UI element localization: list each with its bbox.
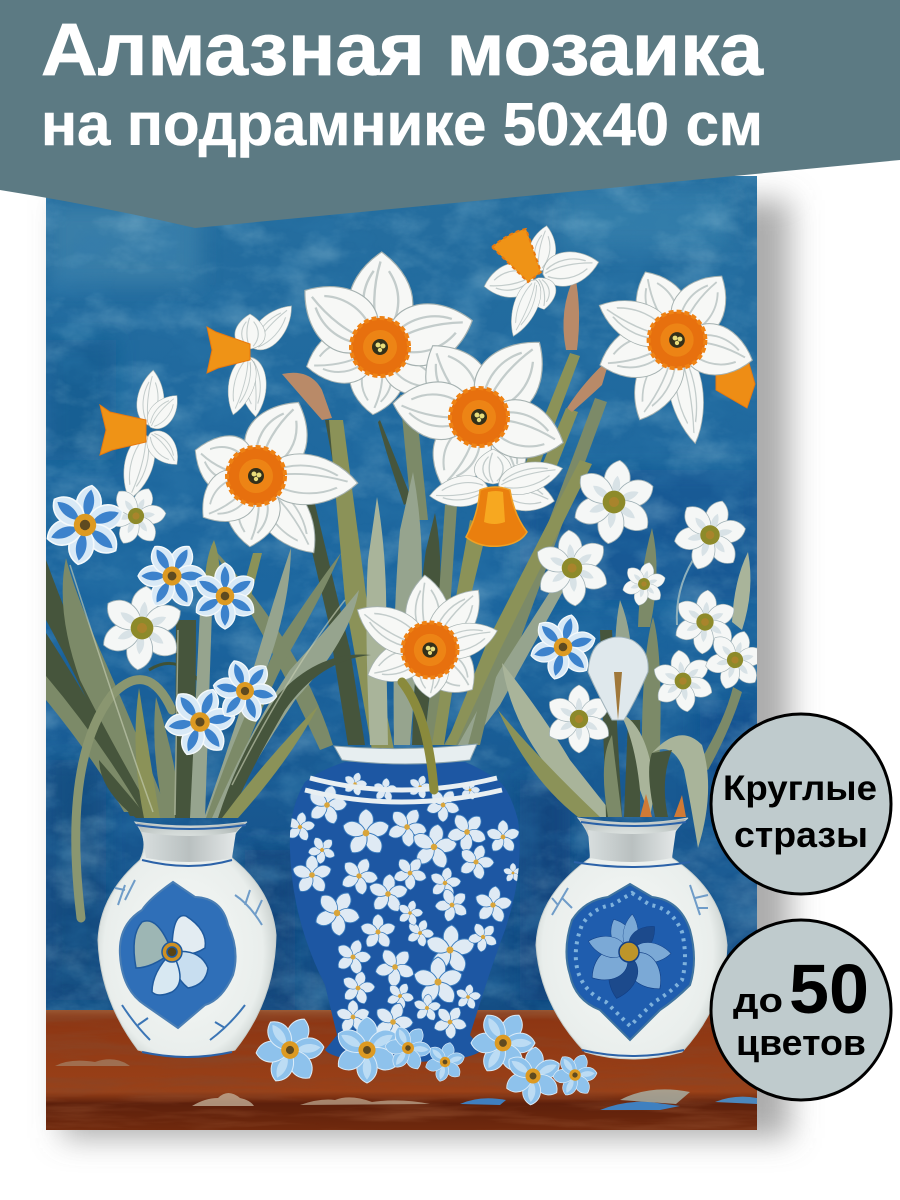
vase bands [310, 778, 497, 790]
flower: fallen 2 [327, 1010, 407, 1090]
leaves and stems: centre vase [210, 353, 607, 750]
canvas shadow [62, 200, 790, 1138]
dry bracts [282, 275, 610, 420]
flower: daffodil top right [598, 272, 753, 444]
flower: fallen 6 [500, 1043, 566, 1109]
flower: blue right [530, 614, 596, 680]
flower: white small [622, 562, 666, 606]
flower: white middle right [537, 530, 607, 606]
vase rim [334, 744, 477, 764]
left vase medallion [120, 882, 236, 1028]
flower: daffodil top centre [304, 251, 473, 416]
painting: daffodils in three vases [43, 176, 773, 1130]
flower: fallen 5 [460, 1000, 546, 1086]
flower: fallen 3 [376, 1016, 440, 1080]
badge: up to 50 colours: 50 [789, 950, 869, 1028]
flower: white low [549, 684, 609, 754]
right vase flower [584, 913, 671, 1002]
large daffodils [100, 223, 759, 707]
table top [46, 1010, 757, 1130]
flower: white low right [654, 650, 712, 712]
stem in front of centre vase [402, 682, 434, 790]
flower: blue far left [46, 484, 124, 566]
flower: greyish side flower [588, 637, 648, 720]
flower: white far right [674, 500, 746, 570]
flower: daffodil lower centre [356, 574, 498, 698]
flower: far left side daffodil [99, 370, 178, 496]
flower: blue low [164, 688, 236, 756]
fallen blue flowers on the table [247, 1000, 603, 1109]
flower: small white left [116, 488, 166, 544]
left vase flower [134, 916, 208, 995]
flower: blue left [137, 546, 206, 606]
flower: fallen 4 [422, 1039, 468, 1085]
left bouquet arched leaf [76, 680, 172, 918]
flower: daffodil left [194, 402, 358, 554]
badge: round rhinestones: стразы [734, 814, 868, 855]
leaves and stems: right vase [498, 528, 750, 848]
title line 1: Алмазная мозаика [41, 8, 764, 91]
flower: white right [676, 590, 734, 654]
flower: white edge [705, 631, 757, 689]
flower: blue low 2 [212, 660, 278, 722]
small white and blue flowers [43, 454, 773, 765]
badge: round rhinestones: Круглые [723, 769, 877, 808]
flower: top side daffodil [481, 223, 602, 341]
flower: left side daffodil [206, 306, 292, 418]
orange sheaths [640, 794, 686, 817]
badge: up to 50 colours [711, 920, 891, 1100]
right vase medallion [566, 884, 694, 1040]
right vase [536, 818, 727, 1059]
title line 2: на подрамнике 50x40 см [41, 91, 763, 158]
flower: white right top [574, 460, 654, 544]
left vase [98, 822, 276, 1057]
flower: fallen 1 [247, 1007, 333, 1093]
badge: up to 50 colours: до [733, 982, 783, 1020]
badge: round rhinestones [711, 714, 891, 894]
flower: white left [103, 586, 181, 670]
flower: trumpet daffodil [428, 449, 566, 546]
centre blue and white vase [282, 744, 523, 1062]
flower: right side daffodil [716, 360, 755, 408]
badge: up to 50 colours: цветов [736, 1022, 866, 1063]
leaves and stems: left vase [46, 540, 371, 918]
flower: daffodil centre [392, 342, 564, 484]
flower: blue left 2 [196, 562, 254, 630]
painted blue background [46, 176, 757, 1010]
flower: fallen 7 [547, 1047, 603, 1103]
header banner [0, 0, 900, 228]
vase floral pattern [282, 769, 523, 1048]
